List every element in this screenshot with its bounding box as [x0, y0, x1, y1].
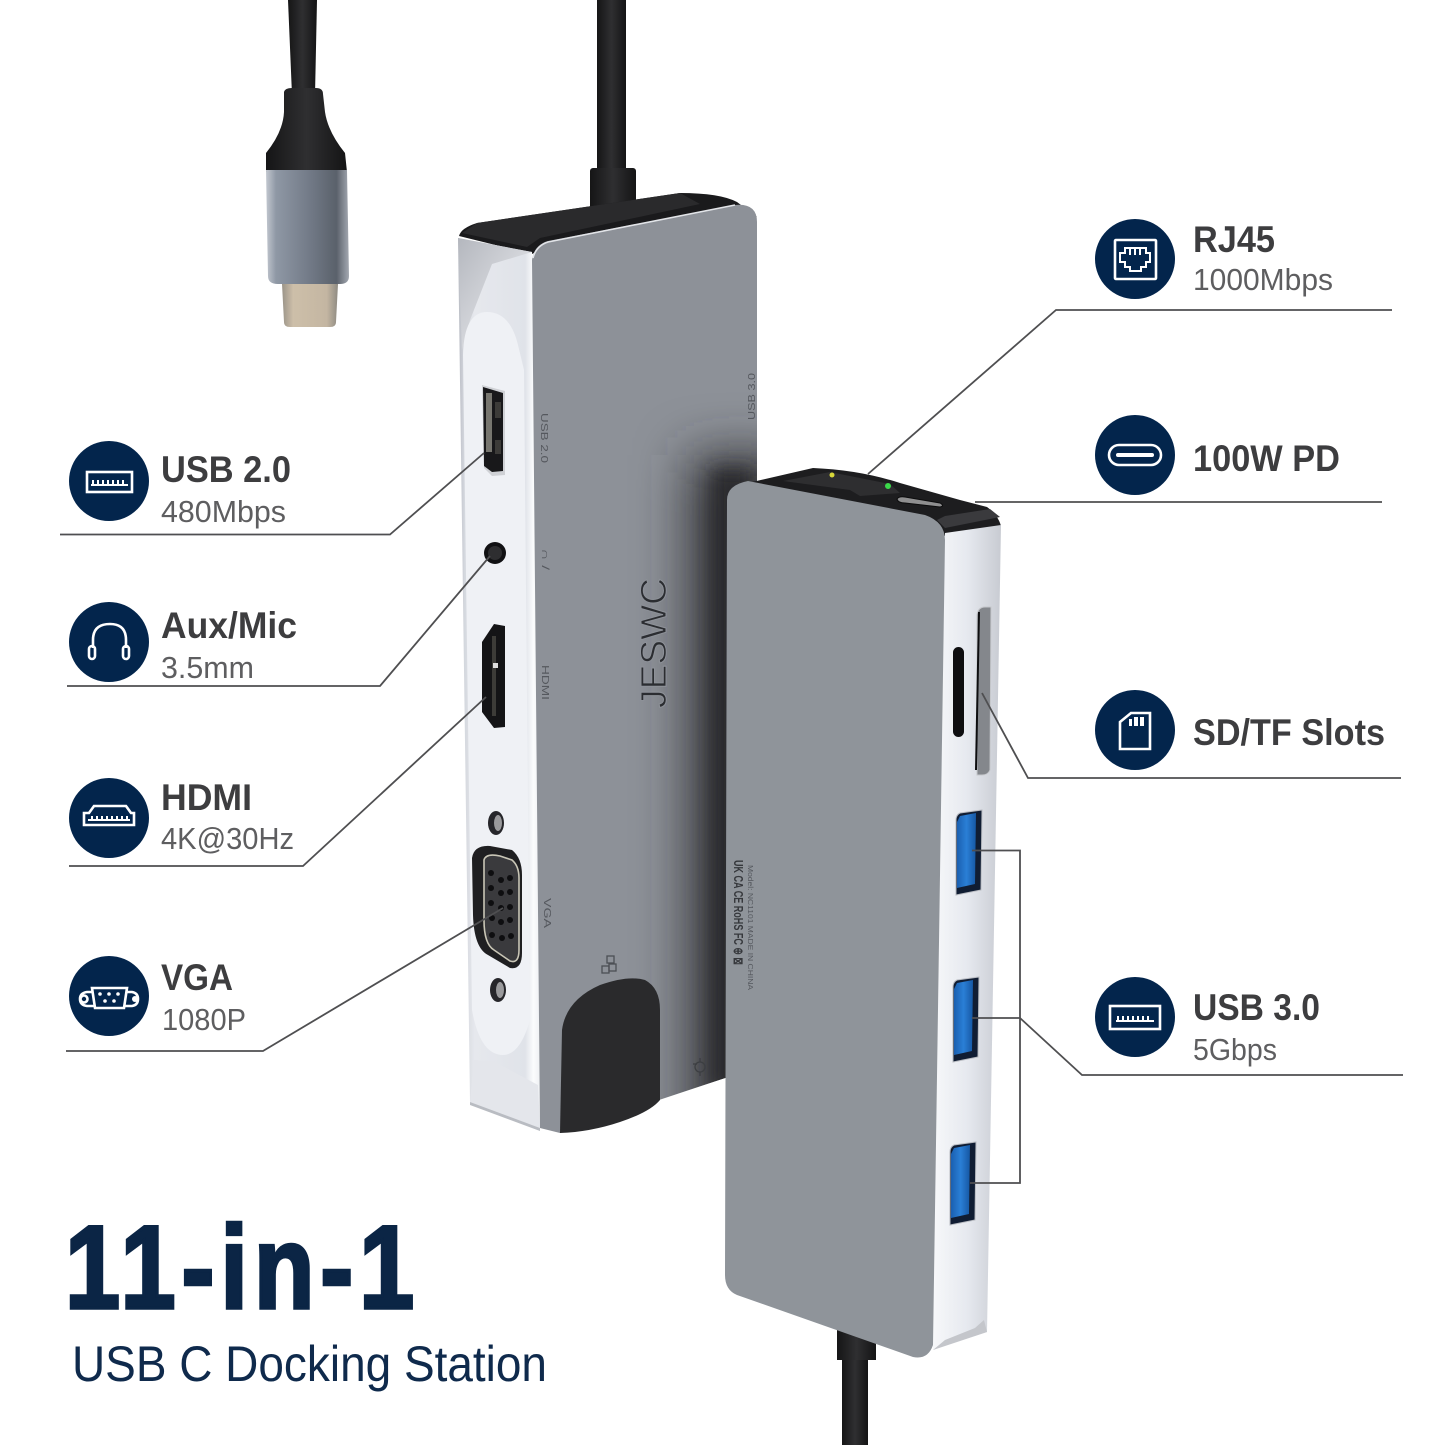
front hub face	[725, 481, 945, 1358]
callout: Aux/Mic	[69, 602, 297, 685]
port: USB 3.0 #2	[953, 977, 979, 1062]
callout: USB 2.0: USB 2.0	[161, 449, 291, 490]
port: USB 3.0 #1	[956, 810, 982, 895]
back hub printed labels: HDMI	[539, 665, 550, 700]
front hub printed label	[731, 860, 755, 990]
port: VGA	[472, 811, 522, 1002]
power icon	[693, 1058, 705, 1076]
back hub top cap	[459, 193, 757, 254]
callout: HDMI: 4K@30Hz	[161, 821, 294, 856]
title: 11-in-1	[65, 1202, 420, 1334]
port: TF slot	[953, 647, 964, 737]
USB-C plug and cable	[266, 0, 349, 327]
main cable to back hub	[590, 0, 636, 218]
callout: SD/TF Slots: SD/TF Slots	[1193, 712, 1385, 753]
shadow cast by front hub	[690, 455, 790, 1175]
JESWC logo: JESWC	[633, 578, 674, 708]
back hub printed labels: USB 2.0	[538, 413, 549, 464]
callout: HDMI: HDMI	[161, 777, 252, 818]
subtitle: USB C Docking Station	[72, 1336, 547, 1392]
callout: USB 2.0	[69, 441, 291, 529]
callout: USB 3.0: 5Gbps	[1193, 1032, 1277, 1067]
callout: 100W PD	[1095, 415, 1340, 495]
back hub printed labels	[538, 372, 758, 928]
callout: RJ45	[1095, 219, 1333, 299]
back hub silver side	[458, 238, 540, 1130]
callout: VGA: VGA	[161, 957, 233, 998]
callout: RJ45: RJ45	[1193, 219, 1275, 260]
back hub printed labels: USB 3.0	[747, 372, 758, 420]
back hub	[458, 193, 757, 1133]
callout: USB 3.0	[1095, 977, 1320, 1067]
port: SD slot	[975, 607, 991, 775]
callout: USB 3.0: USB 3.0	[1193, 987, 1320, 1028]
front hub	[725, 468, 1001, 1358]
callout: SD/TF Slots	[1095, 690, 1385, 770]
front hub printed label: Model: NC1101 MADE IN CHINA	[746, 865, 755, 990]
dark cap step	[937, 509, 1000, 528]
front hub printed label: UK CA CE RoHS FC ⊕ ⊠	[731, 860, 746, 965]
callout: VGA: 1080P	[162, 1002, 246, 1037]
front hub top cap	[752, 468, 1001, 536]
port: audio jack	[484, 542, 506, 564]
callout: Aux/Mic: Aux/Mic	[161, 605, 297, 646]
USB-C port	[897, 497, 942, 507]
callout: RJ45: 1000Mbps	[1193, 262, 1333, 297]
black ethernet cover	[560, 978, 660, 1133]
front hub silver side	[933, 525, 1001, 1350]
RJ45 port	[783, 472, 900, 496]
callout: HDMI	[69, 777, 294, 858]
front hub cable	[837, 1330, 876, 1445]
back hub printed labels: VGA	[541, 898, 552, 928]
back hub printed labels: ∩ /	[539, 548, 550, 570]
back hub face	[532, 205, 757, 1133]
callout: 100W PD: 100W PD	[1193, 438, 1340, 479]
port: USB 2.0	[482, 385, 505, 476]
callout lines	[60, 310, 1403, 1183]
port: HDMI	[482, 624, 505, 728]
callout: USB 2.0: 480Mbps	[161, 494, 286, 529]
port: USB 3.0 #3	[950, 1142, 976, 1225]
callout: Aux/Mic: 3.5mm	[161, 650, 254, 685]
network icon	[602, 956, 616, 973]
callout: VGA	[69, 956, 246, 1037]
